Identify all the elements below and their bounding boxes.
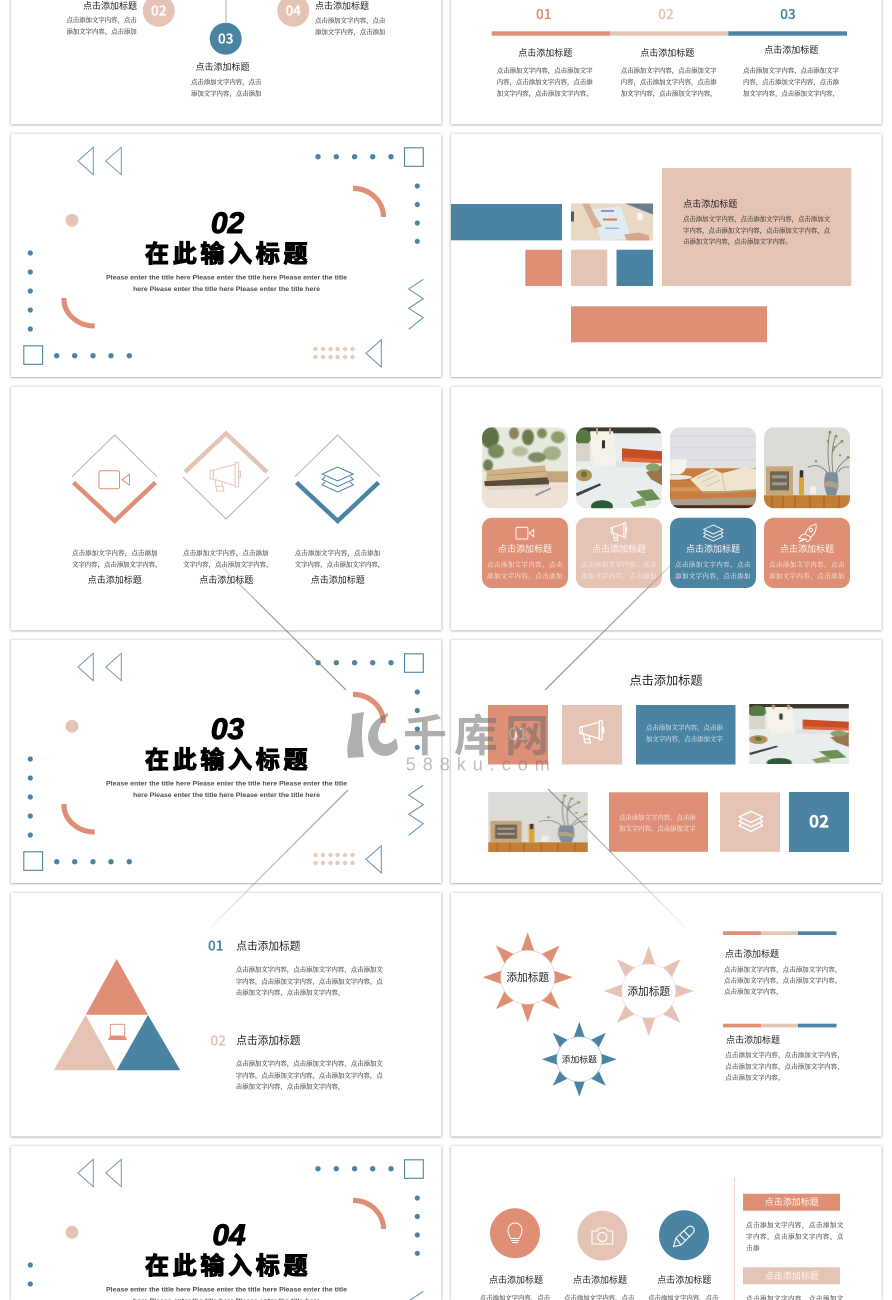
- sidebar item 1: 点击添加标题: [765, 1196, 819, 1207]
- tile orange text: 点击添加文字内容，点击添: [619, 812, 696, 821]
- subtitle: Please enter the title here Please enter the title here Please enter the title: [106, 780, 347, 788]
- column 2 text: 点击添加标题: [640, 47, 694, 58]
- triangle orange: [86, 959, 148, 1015]
- text 2: 点击添加文字内容，点击添加: [183, 548, 269, 557]
- text block 2: [725, 1034, 844, 1082]
- text 1: 点击添加文字内容，点击添加: [72, 548, 158, 557]
- card 1: 点击添加文字内容，点击: [487, 559, 563, 568]
- panel: icon circles with sidebar: [449, 1144, 883, 1300]
- triangle pink: [54, 1015, 116, 1070]
- diamond 2: [183, 434, 269, 519]
- watermark: logo mark: [347, 712, 398, 758]
- circle 04: 04: [286, 0, 301, 20]
- subtitle: here Please enter the title here Please enter the title here: [133, 286, 320, 293]
- icon: layers: [322, 467, 353, 492]
- diamond 3: [295, 435, 380, 521]
- tile blue text: 点击添加文字内容，点击添: [646, 722, 723, 731]
- column 2 text: [564, 1274, 635, 1300]
- card 3: [670, 518, 756, 588]
- blue square: [616, 250, 653, 286]
- number 03: 03: [780, 3, 796, 23]
- tile orange text: [609, 792, 708, 852]
- item 01: 击添加文字内容，点击添加文字内容，: [236, 988, 344, 997]
- subtitle: [106, 274, 347, 293]
- circle: light bulb: [490, 1208, 540, 1258]
- card 4: 点击添加文字内容，点击: [769, 559, 845, 568]
- item 02: [210, 1030, 383, 1091]
- pink text panel: 点击添加文字内容，点击添加文字内容，点击添加文: [683, 214, 831, 223]
- number 01: 01: [536, 3, 551, 23]
- icon: laptop: [108, 1024, 127, 1040]
- item 02: 字内容，点击添加文字内容，点击添加文字内容，点: [236, 1070, 383, 1079]
- orange wide bar: [571, 306, 767, 342]
- panel: three diamonds: [11, 387, 441, 630]
- sun badge orange: [483, 932, 573, 1022]
- text block 1: 点击添加文字内容，: [724, 987, 783, 996]
- subtitle: here Please enter the title here Please enter the title here: [133, 792, 320, 799]
- column 1 text: 点击添加标题: [489, 1274, 543, 1285]
- circle: camera: [577, 1211, 627, 1261]
- panel: section divider 03: [11, 640, 441, 883]
- photo: books and plants: [481, 426, 568, 508]
- sidebar item 2: 点击添加标题: [765, 1270, 819, 1281]
- circle 03: 03: [218, 28, 233, 48]
- sidebar item 1: [743, 1194, 844, 1252]
- blue block: [451, 204, 562, 240]
- panel: section divider 04: [9, 1144, 443, 1300]
- icon: video camera: [99, 471, 130, 489]
- panel: tile grid: [451, 640, 882, 883]
- item 02: 点击添加标题: [236, 1034, 301, 1047]
- text 3: 点击添加文字内容，点击添加: [295, 548, 381, 557]
- card 4: [764, 518, 850, 588]
- tri-colour bar 2: [723, 1024, 836, 1027]
- tile blue text: [636, 705, 736, 764]
- photo: vase on shelf: [764, 427, 850, 508]
- pink text panel: 字内容，点击添加文字内容，点击添加文字内容，点: [683, 225, 831, 234]
- watermark: url: 588ku.com: [406, 754, 550, 774]
- tri-colour bar 1: [723, 931, 836, 935]
- circle 03: [210, 23, 242, 55]
- card 4: 点击添加标题: [780, 543, 834, 554]
- vertical rule: [733, 1178, 735, 1300]
- text block 2: 点击添加标题: [726, 1034, 780, 1045]
- circle 04: [277, 0, 309, 27]
- card 3: 点击添加标题: [686, 543, 740, 554]
- pink square: [571, 250, 607, 286]
- subtitle: Please enter the title here Please enter the title here Please enter the title: [106, 274, 347, 282]
- item 01: 字内容，点击添加文字内容，点击添加文字内容，点: [236, 976, 383, 985]
- sun badge blue: 添加标题: [562, 1054, 597, 1064]
- watermark: brand name: 千库网: [403, 712, 556, 761]
- sidebar item 2: [743, 1267, 844, 1300]
- item 02: 击添加文字内容，点击添加文字内容，: [236, 1082, 344, 1091]
- column 3 text: [648, 1274, 719, 1300]
- text block 04: 添加文字内容，点击添加: [315, 27, 386, 36]
- item 02: 点击添加文字内容，点击添加文字内容，点击添加文: [236, 1059, 383, 1068]
- column 2 text: 点击添加文字内容，点击添加文字: [621, 65, 717, 74]
- tile 01: 01: [508, 720, 528, 745]
- text block 03: [191, 61, 262, 97]
- column 1 text: 点击添加标题: [518, 47, 572, 58]
- watermark: diagonal lines: [203, 548, 693, 935]
- section number: 04: [212, 1219, 246, 1252]
- tile 02: 02: [809, 808, 829, 832]
- column 2 text: 点击添加标题: [573, 1274, 627, 1285]
- text block 1: 点击添加文字内容，点击添加文字内容，: [724, 964, 841, 973]
- card 2: 点击添加文字内容，点击: [581, 559, 657, 568]
- text block 04: 点击添加标题: [315, 0, 369, 11]
- text block 02: 添加文字内容，点击添加: [66, 26, 137, 35]
- card 4: 添加文字内容，点击添加: [769, 571, 845, 580]
- circle 02: [143, 0, 175, 27]
- section number: 02: [211, 207, 244, 240]
- text block 02: [66, 0, 137, 35]
- tile layers: [720, 792, 780, 852]
- decorative geometric frame: [24, 147, 423, 367]
- column 3 text: 点击添加标题: [657, 1274, 711, 1285]
- photo: flat lay desk: [749, 704, 849, 764]
- icon: megaphone: [210, 462, 241, 491]
- text block 03: 点击添加标题: [195, 61, 250, 72]
- column 1 text: 点击添加文字内容，点击添加文字: [497, 65, 593, 74]
- item 02: 02: [210, 1030, 226, 1050]
- text 2: 文字内容，点击添加文字内容，: [183, 560, 272, 569]
- column 1 text: 加文字内容，点击添加文字内容，: [497, 88, 593, 97]
- diamond 1: [72, 435, 157, 521]
- connector line: [225, 0, 227, 22]
- text block 04: 点击添加文字内容，点击: [315, 16, 386, 25]
- card 1: 点击添加标题: [498, 543, 552, 554]
- column 2 text: 内容，点击添加文字内容，点击添: [621, 77, 717, 86]
- column 3 text: [743, 44, 839, 97]
- sun badge pink: 添加标题: [627, 985, 670, 998]
- text 2: [183, 548, 272, 585]
- text block 1: [724, 948, 841, 996]
- text block 1: 点击添加文字内容，点击添加文字内容，: [724, 976, 841, 985]
- column 2 text: [621, 47, 717, 97]
- photo: flat lay desk: [575, 427, 662, 512]
- card 1: [482, 518, 568, 588]
- column 3 text: 点击添加文字内容，点击添加文字: [743, 65, 839, 74]
- column 1 text: [497, 47, 593, 97]
- column 3 text: 内容，点击添加文字内容，点击添: [743, 77, 839, 86]
- decorative geometric frame: [24, 653, 423, 873]
- text 1: 文字内容，点击添加文字内容，: [72, 560, 161, 569]
- sun badge pink: [604, 946, 694, 1036]
- text 1: 点击添加标题: [88, 574, 142, 585]
- text block 2: 点击添加文字内容，: [725, 1073, 785, 1082]
- tile blue text: 加文字内容，点击添加文字: [646, 734, 723, 743]
- card 3: 添加文字内容，点击添加: [675, 571, 751, 580]
- text block 2: 点击添加文字内容，点击添加文字内容，: [725, 1050, 844, 1059]
- section title: 在此输入标题: [145, 747, 311, 774]
- panel: slide 2, three column timeline: [451, 0, 882, 124]
- column 3 text: 加文字内容，点击添加文字内容，: [743, 88, 839, 97]
- card 1: 添加文字内容，点击添加: [487, 571, 563, 580]
- number 02: 02: [658, 3, 674, 23]
- circle 02: 02: [151, 0, 167, 20]
- column 1 text: 内容，点击添加文字内容，点击添: [497, 77, 593, 86]
- sun badge blue: [542, 1022, 617, 1097]
- tile 02: [789, 792, 849, 852]
- section title: 在此输入标题: [145, 241, 311, 268]
- tile orange text: 加文字内容，点击添加文字: [619, 824, 696, 833]
- sidebar item 1: 击添: [746, 1243, 760, 1252]
- panel: sun badges: [451, 893, 882, 1136]
- pink text panel: [662, 168, 851, 286]
- text block 02: 点击添加文字内容，点击: [66, 15, 137, 24]
- column 1 text: [480, 1274, 551, 1300]
- card 2: 添加文字内容，点击添加: [581, 571, 657, 580]
- panel: four photo cards: [451, 387, 882, 630]
- text 3: 点击添加标题: [311, 574, 365, 585]
- text block 04: [315, 0, 386, 36]
- text 3: 文字内容，点击添加文字内容，: [295, 560, 384, 569]
- text block 1: 点击添加标题: [725, 948, 779, 959]
- text block 03: 添加文字内容，点击添加: [191, 88, 262, 97]
- section title: 在此输入标题: [145, 1253, 311, 1280]
- heading: 点击添加标题: [629, 673, 703, 687]
- icon: rocket: [799, 524, 816, 542]
- decorative geometric frame: [24, 1159, 423, 1300]
- item 01: 点击添加标题: [236, 940, 301, 952]
- text block 02: 点击添加标题: [83, 0, 137, 11]
- panel: section divider 02: [11, 134, 441, 377]
- sidebar item 1: 字内容，点击添加文字内容，点: [746, 1231, 844, 1240]
- subtitle: Please enter the title here Please enter the title here Please enter the title: [106, 1286, 347, 1294]
- orange square: [525, 250, 562, 286]
- text 2: 点击添加标题: [199, 574, 253, 585]
- text block 03: 点击添加文字内容，点击: [191, 77, 262, 86]
- tile megaphone: [562, 705, 622, 764]
- item 01: [208, 935, 383, 997]
- subtitle: [106, 780, 347, 799]
- pink text panel: 击添加文字内容，点击添加文字内容。: [683, 237, 792, 246]
- text block 2: 点击添加文字内容，点击添加文字内容，: [725, 1061, 844, 1070]
- section number: 03: [211, 713, 244, 746]
- circle: pencil: [659, 1210, 709, 1260]
- subtitle: [106, 1286, 347, 1300]
- card 2: [576, 518, 662, 588]
- photo: hands on documents: [571, 204, 653, 240]
- tile 01: [488, 705, 548, 764]
- panel: slide with colour blocks: [451, 134, 882, 377]
- text 3: [295, 548, 384, 585]
- triangle blue: [117, 1015, 180, 1070]
- sidebar item 1: 点击添加文字内容，点击添加文: [746, 1220, 844, 1229]
- photo: vase on shelf: [488, 792, 588, 852]
- text 1: [72, 548, 161, 585]
- panel: slide 1, numbered circles: [11, 0, 441, 124]
- card 2: 点击添加标题: [592, 543, 646, 554]
- item 01: 点击添加文字内容，点击添加文字内容，点击添加文: [236, 965, 383, 974]
- column 3 text: 点击添加标题: [764, 44, 818, 55]
- sun badge orange: 添加标题: [506, 971, 549, 984]
- item 01: 01: [208, 935, 223, 955]
- tri-colour bar: [492, 31, 847, 36]
- card 3: 点击添加文字内容，点击: [675, 559, 751, 568]
- panel: triangle diagram: [11, 893, 441, 1136]
- column 2 text: 加文字内容，点击添加文字内容，: [621, 88, 717, 97]
- pink text panel: 点击添加标题: [683, 198, 737, 209]
- photo: open book: [670, 428, 756, 508]
